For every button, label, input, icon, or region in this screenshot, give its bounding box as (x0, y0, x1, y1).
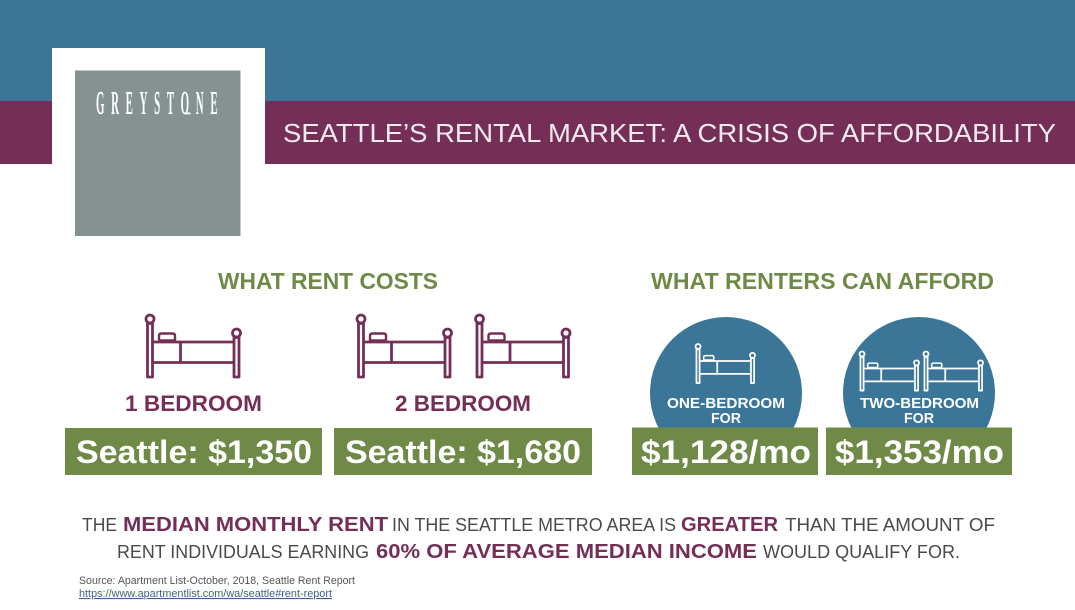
circle: two-bedroom: TWO-BEDROOM (860, 395, 979, 412)
circle: one-bedroom (650, 317, 802, 469)
summary statement (82, 513, 995, 563)
heading: what rent costs: WHAT RENT COSTS (218, 268, 438, 294)
logo block: GREYSTONE (96, 86, 218, 122)
source note (79, 575, 355, 600)
circle: two-bedroom: FOR (904, 410, 934, 427)
source note: https://www.apartmentlist.com/wa/seattle#rent-report (79, 588, 332, 600)
heading: what renters can afford: WHAT RENTERS CAN AFFORD (651, 268, 994, 294)
summary statement: MEDIAN MONTHLY RENT (123, 513, 389, 536)
price box: one-bedroom afford (632, 428, 818, 475)
label: 1 bedroom: 1 BEDROOM (125, 391, 262, 416)
summary statement: GREATER (681, 513, 778, 536)
circle: one-bedroom: FOR (711, 410, 741, 427)
price box: two-bedroom afford (826, 428, 1012, 475)
price box: two-bedroom afford: $1,353/mo (835, 434, 1004, 470)
price box: 2 bedroom (334, 428, 592, 475)
summary statement: RENT INDIVIDUALS EARNING (117, 541, 369, 562)
source note: Source: Apartment List-October, 2018, Seattle Rent Report (79, 575, 355, 587)
summary statement: 60% OF AVERAGE MEDIAN INCOME (376, 540, 757, 563)
summary statement: WOULD QUALIFY FOR. (763, 541, 960, 562)
circle: one-bedroom: ONE-BEDROOM (667, 395, 785, 412)
summary statement: IN THE SEATTLE METRO AREA IS (392, 514, 676, 535)
label: 2 bedroom: 2 BEDROOM (395, 391, 531, 416)
icon: two beds (357, 315, 570, 377)
price box: 2 bedroom: Seattle: $1,680 (345, 434, 581, 470)
top blue band (0, 0, 1075, 101)
summary statement: THAN THE AMOUNT OF (785, 514, 995, 535)
title: SEATTLE’S RENTAL MARKET: A CRISIS OF AFFORDABILITY (283, 120, 1056, 148)
circle: two-bedroom (843, 317, 995, 469)
price box: one-bedroom afford: $1,128/mo (641, 434, 811, 470)
purple title band (0, 101, 1075, 164)
icon: one bed (146, 315, 240, 377)
price box: 1 bedroom (65, 428, 322, 475)
summary statement: THE (82, 514, 117, 535)
price box: 1 bedroom: Seattle: $1,350 (76, 434, 312, 470)
logo block (52, 48, 265, 243)
